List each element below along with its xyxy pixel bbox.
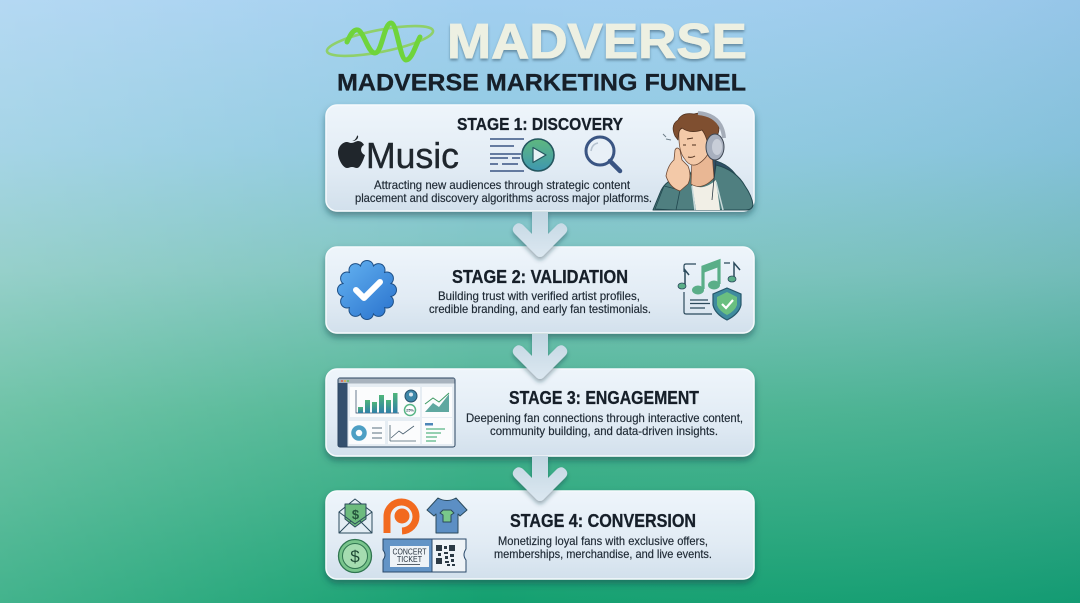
title: MADVERSE MARKETING FUNNEL xyxy=(337,70,746,96)
dashboard illustration xyxy=(338,378,455,447)
heading: stage 4: STAGE 4: CONVERSION xyxy=(510,511,696,531)
brand: Music: Music xyxy=(366,135,459,176)
heading: stage 3: STAGE 3: ENGAGEMENT xyxy=(509,388,699,408)
description: stage 1 xyxy=(355,178,652,205)
description: stage 4 xyxy=(494,534,712,561)
icon: magnifying glass xyxy=(586,137,620,171)
logo wordmark: MADVERSE xyxy=(447,15,747,69)
icon: verified badge xyxy=(337,260,397,320)
icon: concert ticket with QR code: CONCERT xyxy=(392,548,427,556)
icon: dollar coin xyxy=(338,540,372,572)
description: stage 4: Monetizing loyal fans with exclusive offers, xyxy=(498,534,708,548)
description: stage 4: memberships, merchandise, and live events. xyxy=(494,547,712,561)
icon: patreon logo xyxy=(387,502,416,533)
panel: stage 2 validation xyxy=(326,247,754,333)
icon: music notes with shield xyxy=(678,261,741,320)
icon: dollar coin: $ xyxy=(350,547,360,566)
panel: stage 4 conversion xyxy=(326,491,754,579)
description: stage 1: placement and discovery algorithms across major platforms. xyxy=(355,191,652,205)
icon: apple logo xyxy=(338,136,365,168)
panel: stage 1 discovery xyxy=(326,105,754,211)
icon: t-shirt xyxy=(427,498,467,533)
description: stage 3 xyxy=(466,411,743,438)
description: stage 3: community building, and data-driven insights. xyxy=(490,424,718,438)
dashboard illustration: 25% xyxy=(406,408,414,412)
icon: concert ticket with QR code xyxy=(383,539,466,572)
description: stage 2 xyxy=(429,289,651,316)
icon: envelope with money: $ xyxy=(352,507,360,522)
illustration: listener with headphones xyxy=(653,113,753,210)
arrow: stage 3 to 4 xyxy=(513,456,567,501)
description: stage 1: Attracting new audiences through strategic content xyxy=(374,178,631,192)
description: stage 2: Building trust with verified artist profiles, xyxy=(438,289,640,303)
logo icon: green wave and orbit xyxy=(325,20,435,62)
arrow: stage 2 to 3 xyxy=(513,334,567,379)
description: stage 3: Deepening fan connections through interactive content, xyxy=(466,411,743,425)
icon: concert ticket with QR code: TICKET xyxy=(397,555,422,564)
arrow: stage 1 to 2 xyxy=(513,212,567,257)
heading: stage 1: STAGE 1: DISCOVERY xyxy=(457,114,623,134)
description: stage 2: credible branding, and early fan testimonials. xyxy=(429,302,651,316)
icon: content playlist xyxy=(490,139,554,171)
icon: envelope with money xyxy=(339,499,372,533)
panel: stage 3 engagement xyxy=(326,369,754,456)
heading: stage 2: STAGE 2: VALIDATION xyxy=(452,267,628,287)
